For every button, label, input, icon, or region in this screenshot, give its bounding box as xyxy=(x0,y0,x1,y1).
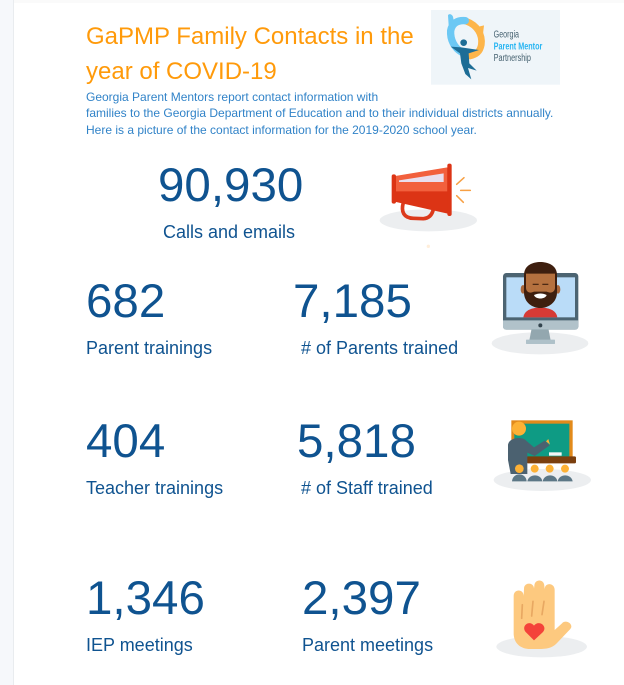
logo: Georgia Parent Mentor Partnership: Georgia xyxy=(494,29,519,40)
stat: parent meetings xyxy=(302,572,433,655)
stat: teacher trainings: Teacher trainings xyxy=(86,478,223,498)
stat: parent trainings: Parent trainings xyxy=(86,338,212,358)
stat: IEP meetings: IEP meetings xyxy=(86,635,193,655)
stat: teacher trainings xyxy=(86,415,223,498)
icon: teacher at chalkboard xyxy=(494,420,591,491)
stat: staff trained: # of Staff trained xyxy=(301,478,433,498)
stat: parent meetings: Parent meetings xyxy=(302,635,433,655)
logo: Georgia Parent Mentor Partnership xyxy=(431,10,560,85)
stat: IEP meetings xyxy=(86,572,205,655)
stat: IEP meetings: 1,346 xyxy=(86,572,205,625)
intro text block: Georgia Parent Mentors report contact information with xyxy=(86,90,378,104)
stat: calls and emails: Calls and emails xyxy=(163,222,295,242)
stat: parents trained: # of Parents trained xyxy=(301,338,458,358)
stat: parents trained xyxy=(293,275,458,358)
stat: calls and emails: 90,930 xyxy=(158,159,303,212)
icon: megaphone xyxy=(380,164,477,248)
title xyxy=(86,23,414,85)
intro text block xyxy=(86,90,553,137)
logo: Georgia Parent Mentor Partnership: Parent Mentor xyxy=(494,41,542,52)
stat: staff trained xyxy=(297,415,433,498)
stat: parent trainings: 682 xyxy=(86,275,165,328)
stat: staff trained: 5,818 xyxy=(297,415,416,468)
stat: parent meetings: 2,397 xyxy=(302,572,421,625)
stat: parent trainings xyxy=(86,275,212,358)
stat: parents trained: 7,185 xyxy=(293,275,412,328)
icon: raised hand with heart xyxy=(496,580,587,657)
intro text block: Here is a picture of the contact information for the 2019-2020 school year. xyxy=(86,123,477,137)
icon: man on computer screen xyxy=(492,262,588,354)
logo: Georgia Parent Mentor Partnership: Partnership xyxy=(494,53,531,64)
intro text block: families to the Georgia Department of Education and to their individual districts annually. xyxy=(86,106,553,120)
title: GaPMP Family Contacts in the xyxy=(86,23,414,50)
stat: calls and emails xyxy=(158,159,303,242)
stat: teacher trainings: 404 xyxy=(86,415,165,468)
title: year of COVID-19 xyxy=(86,58,277,85)
